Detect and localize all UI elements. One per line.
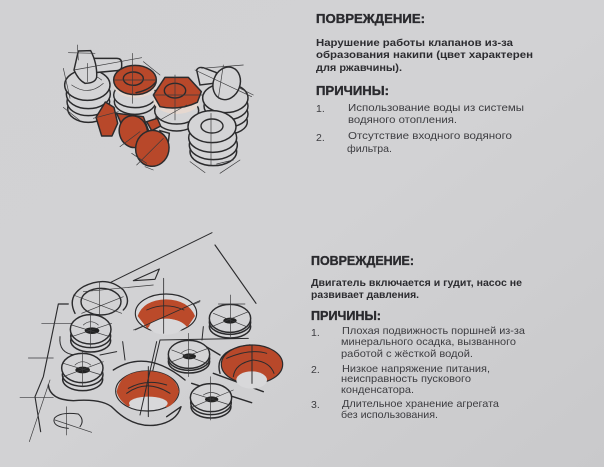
cause list: фильтра.	[347, 143, 392, 155]
cause list: 1.	[311, 327, 320, 339]
piston: upper left	[70, 313, 112, 352]
heading: causes: ПРИЧИНЫ:	[311, 309, 381, 323]
valve stack: back left	[63, 45, 142, 122]
empty bore: top left	[72, 282, 153, 315]
cause list: минерального осадка, вызванного	[341, 336, 516, 348]
pump head outline	[20, 233, 263, 442]
cause list	[311, 325, 525, 421]
description: damage: Нарушение работы клапанов из-за	[316, 37, 513, 49]
valve stack: front	[188, 111, 240, 173]
description: damage: образования накипи (цвет характерен	[316, 49, 533, 61]
description: damage	[316, 37, 533, 74]
heading: causes: ПРИЧИНЫ:	[316, 84, 389, 98]
cause list: Плохая подвижность поршней из-за	[342, 325, 525, 337]
cause list: Низкое напряжение питания,	[342, 363, 490, 375]
piston: lower left	[62, 352, 103, 391]
cause list: без использования.	[341, 409, 438, 421]
illustration: valves with scale deposits	[63, 45, 253, 173]
description: damage: для ржавчины).	[316, 62, 402, 74]
valve stack: red centre	[153, 75, 203, 131]
description: damage	[311, 277, 522, 301]
piston: centre	[168, 333, 210, 377]
heading: damage: ПОВРЕЖДЕНИЕ:	[311, 254, 414, 268]
cause list: Использование воды из системы	[348, 102, 524, 114]
valve stack: back right	[195, 63, 253, 134]
cause list: 3.	[311, 399, 320, 411]
cause list: 2.	[316, 132, 325, 144]
cause list	[316, 102, 524, 155]
piston: upper right	[209, 295, 251, 338]
valve stack: red top middle	[114, 53, 160, 114]
cause list: конденсатора.	[341, 384, 414, 396]
cause list: водяного отопления.	[348, 114, 457, 126]
description: damage: развивает давления.	[311, 289, 419, 301]
cause list: Длительное хранение агрегата	[342, 398, 499, 410]
text block: bottom damage	[311, 254, 525, 421]
illustration: pump head with pistons	[20, 233, 283, 442]
cause list: Отсутствие входного водяного	[348, 130, 512, 142]
cause list: 1.	[316, 103, 325, 115]
red bore: top	[135, 278, 200, 335]
text block: top damage	[316, 12, 533, 155]
cause list: неисправность пускового	[341, 373, 471, 385]
piston: lower right	[190, 377, 233, 420]
red valve pieces	[93, 102, 172, 170]
cause list: работой с жёсткой водой.	[341, 348, 473, 360]
heading: damage: ПОВРЕЖДЕНИЕ:	[316, 12, 425, 26]
red bore: right	[221, 345, 283, 389]
red bore: bottom	[116, 342, 179, 417]
cause list: 2.	[311, 364, 320, 376]
description: damage: Двигатель включается и гудит, насос не	[311, 277, 522, 289]
